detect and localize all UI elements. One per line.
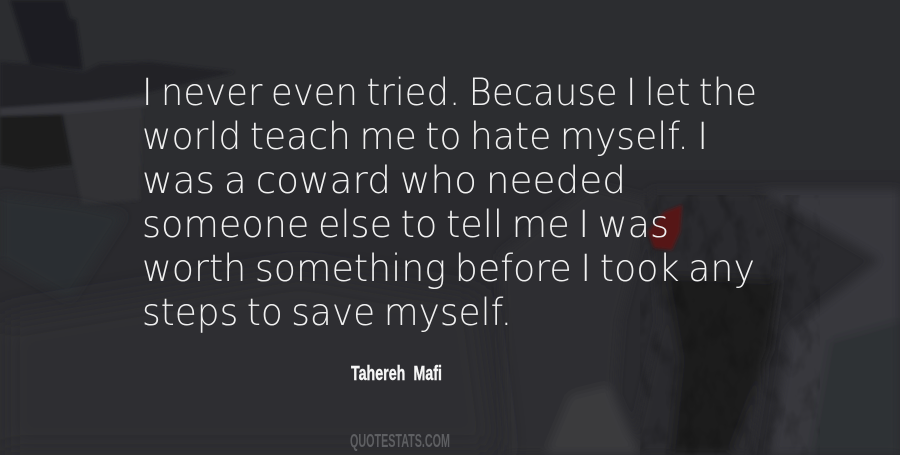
quote text: world teach me to hate myself. I — [142, 115, 708, 158]
author name: Tahereh Mafi — [351, 363, 442, 385]
quote text: worth something before I took any — [142, 247, 755, 290]
quote text: someone else to tell me I was — [142, 203, 669, 246]
quote text: steps to save myself. — [142, 291, 512, 334]
quote text — [142, 71, 757, 334]
quote text: I never even tried. Because I let the — [142, 71, 757, 114]
watermark: QUOTESTATS.COM — [350, 431, 450, 451]
texture: snow and ice grain — [640, 195, 820, 455]
icon: red climber patch — [648, 205, 682, 250]
quote text: was a coward who needed — [142, 159, 626, 202]
